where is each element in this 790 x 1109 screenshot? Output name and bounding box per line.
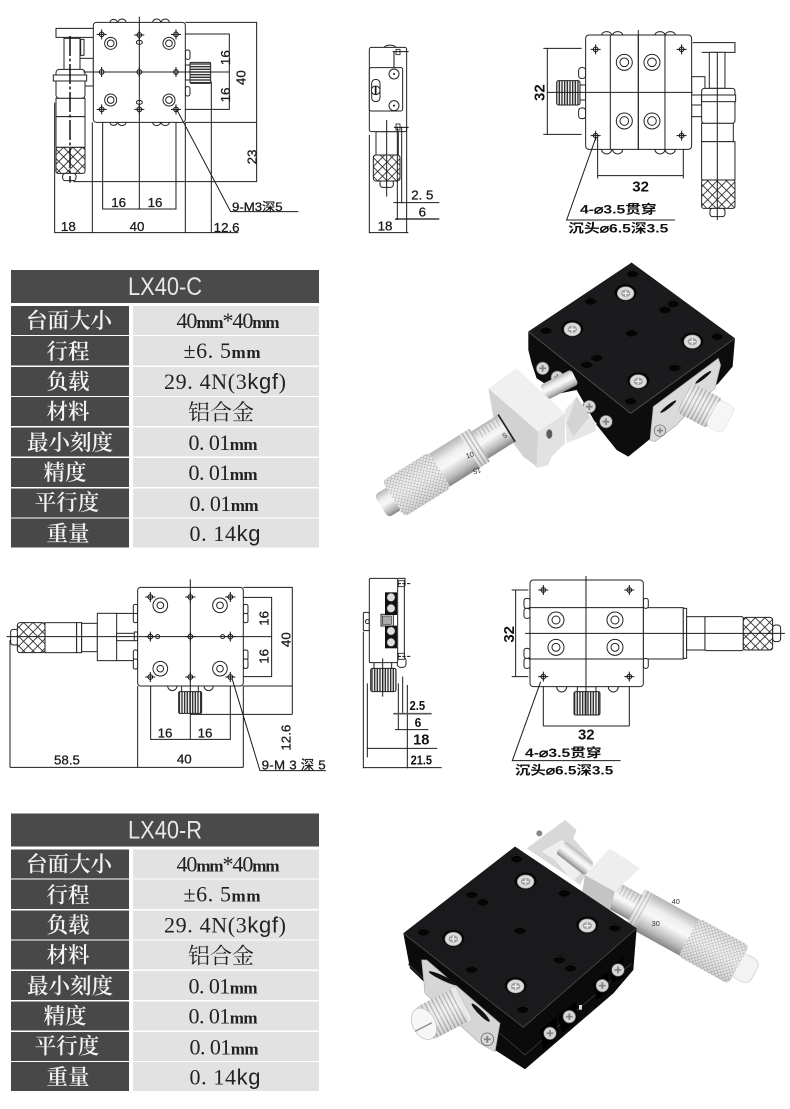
dimension labels: 沉头⌀6.5深3.5 — [568, 221, 668, 236]
table header: LX40-R — [128, 816, 202, 844]
micrometer scale numbers — [464, 431, 509, 476]
dimension labels — [378, 188, 433, 234]
drawing: LX40-C top view with dimensions — [53, 17, 298, 235]
micrometer — [602, 876, 765, 993]
aluminium block — [582, 848, 640, 910]
dimension labels: 40 — [177, 752, 192, 767]
row values: 0. 01mm — [188, 430, 258, 455]
photo: LX40-C stage with micrometer — [370, 263, 736, 524]
row backgrounds — [11, 306, 319, 548]
dimension labels: 32 — [632, 179, 649, 196]
stage plate — [524, 580, 648, 715]
dimension labels: 18 — [378, 219, 392, 234]
stage plate — [557, 32, 692, 154]
dimension labels: 16 — [256, 611, 271, 626]
stage plate — [133, 587, 248, 713]
table: LX40-C specifications — [11, 270, 319, 548]
dimension labels: 6 — [419, 204, 426, 219]
row labels: 平行度 — [35, 1034, 99, 1058]
row labels: 台面大小 — [26, 852, 113, 876]
dimension lines — [512, 576, 785, 761]
dimension labels: 12.6 — [214, 220, 240, 235]
dimension labels: 40 — [130, 219, 144, 234]
row values: 0. 01mm — [188, 460, 258, 485]
dimension labels: 16 — [158, 726, 172, 741]
row values: 29. 4N(3kgf) — [164, 369, 286, 394]
row labels — [26, 852, 113, 1090]
stage body — [528, 263, 735, 457]
row labels: 负载 — [46, 370, 90, 394]
row values: 40mm*40mm — [176, 308, 280, 333]
dimension labels: 16 — [218, 50, 233, 65]
dimension labels: 16 — [218, 88, 233, 102]
micrometer outline — [53, 28, 93, 181]
row labels: 行程 — [46, 340, 90, 364]
dimension labels: 2. 5 — [411, 188, 433, 203]
dimension labels: 9-M3深5 — [232, 200, 283, 214]
dimension labels: 9-M 3 深 5 — [262, 758, 326, 773]
row labels: 重量 — [46, 522, 90, 546]
shaft — [556, 841, 594, 876]
shaft — [540, 369, 579, 400]
dimension lines — [7, 579, 326, 771]
row values: 铝合金 — [188, 400, 254, 425]
row labels: 精度 — [43, 1004, 87, 1028]
micrometer outline — [643, 608, 781, 659]
dimension labels: 16 — [256, 649, 271, 664]
micrometer — [370, 410, 518, 524]
micrometer outline — [11, 613, 138, 661]
row values: 铝合金 — [188, 944, 254, 968]
micrometer scale numbers: 15 — [472, 466, 482, 476]
row labels: 精度 — [43, 461, 87, 485]
dimension lines — [363, 632, 442, 768]
dimension lines — [55, 17, 298, 233]
row labels: 材料 — [46, 944, 90, 968]
micrometer scale numbers: 5 — [501, 431, 509, 440]
holes and screws — [418, 854, 624, 1050]
dimension lines — [543, 30, 717, 220]
micrometer scale numbers: 10 — [464, 449, 475, 461]
drawing: LX40-R top view with dimensions — [7, 579, 326, 773]
table header: LX40-C — [128, 273, 202, 301]
dimension labels: 沉头⌀6.5深3.5 — [515, 763, 613, 778]
dimension labels: 18 — [413, 733, 429, 749]
dimension labels: 32 — [578, 726, 595, 743]
row backgrounds — [11, 850, 319, 1091]
micrometer scale numbers: 40 — [672, 897, 680, 906]
front bracket and knob — [405, 960, 500, 1052]
row values: 0. 01mm — [190, 491, 258, 516]
dimension labels: 58.5 — [54, 752, 80, 767]
row values: ±6. 5mm — [184, 338, 260, 363]
dimension lines — [369, 120, 439, 233]
row labels: 最小刻度 — [27, 974, 113, 998]
row values — [164, 308, 286, 546]
dimension labels: 16 — [111, 195, 126, 210]
drawing: LX40-R side view — [363, 578, 442, 768]
dimension labels: 18 — [61, 219, 76, 234]
aluminium block — [488, 368, 597, 468]
row values: 29. 4N(3kgf) — [164, 912, 286, 938]
dimension labels: 16 — [198, 726, 212, 741]
micrometer scale numbers — [652, 897, 680, 928]
dimension labels: 40 — [279, 632, 294, 647]
dimension labels: 2.5 — [409, 698, 426, 713]
dimension labels — [61, 50, 283, 235]
row values: 0. 01mm — [190, 1034, 258, 1060]
dimension labels — [409, 698, 432, 768]
table: LX40-R specifications — [11, 814, 319, 1091]
row labels: 最小刻度 — [27, 431, 113, 455]
table header — [11, 270, 319, 303]
row labels: 负载 — [46, 914, 90, 938]
row labels: 台面大小 — [26, 309, 113, 333]
holes and screws — [536, 269, 723, 428]
dimension labels: 12.6 — [279, 725, 294, 751]
dimension labels: 23 — [244, 150, 259, 164]
row labels: 平行度 — [35, 491, 99, 515]
dimension labels — [532, 84, 668, 236]
drawing: LX40-R bottom view — [501, 576, 785, 778]
micrometer scale numbers: 30 — [652, 919, 660, 928]
stage plate — [93, 19, 211, 126]
row labels: 行程 — [46, 884, 90, 908]
dimension labels: 32 — [532, 84, 549, 101]
drawing: LX40-C bottom view — [532, 30, 736, 236]
right bracket and knob — [650, 358, 736, 442]
table header — [11, 814, 319, 846]
photo: LX40-R stage with micrometer — [403, 820, 765, 1069]
row values: 0. 14kg — [190, 521, 260, 546]
row values: 0. 01mm — [188, 974, 258, 998]
row values: 0. 01mm — [188, 1004, 258, 1028]
dimension labels — [54, 611, 326, 773]
stage top face — [528, 263, 735, 413]
dimension labels: 6 — [415, 715, 421, 730]
stage top face — [403, 847, 637, 1027]
row values: ±6. 5mm — [184, 882, 260, 906]
row labels: 重量 — [46, 1066, 90, 1090]
stage body — [403, 847, 637, 1069]
dimension labels: 16 — [148, 195, 162, 210]
row values: 0. 14kg — [190, 1064, 260, 1090]
row labels — [26, 309, 113, 546]
row values — [164, 852, 286, 1090]
dimension labels — [501, 626, 613, 778]
dimension labels: 4-⌀3.5贯穿 — [525, 745, 602, 760]
dimension labels: 32 — [501, 626, 518, 643]
top bracket — [527, 820, 593, 885]
row values: 40mm*40mm — [176, 852, 280, 876]
dimension labels: 4-⌀3.5贯穿 — [580, 201, 657, 216]
dimension labels: 40 — [233, 70, 248, 85]
micrometer outline — [692, 43, 736, 217]
drawing: LX40-C side view — [369, 45, 439, 234]
dimension labels: 21.5 — [411, 753, 432, 768]
row labels: 材料 — [46, 400, 90, 424]
